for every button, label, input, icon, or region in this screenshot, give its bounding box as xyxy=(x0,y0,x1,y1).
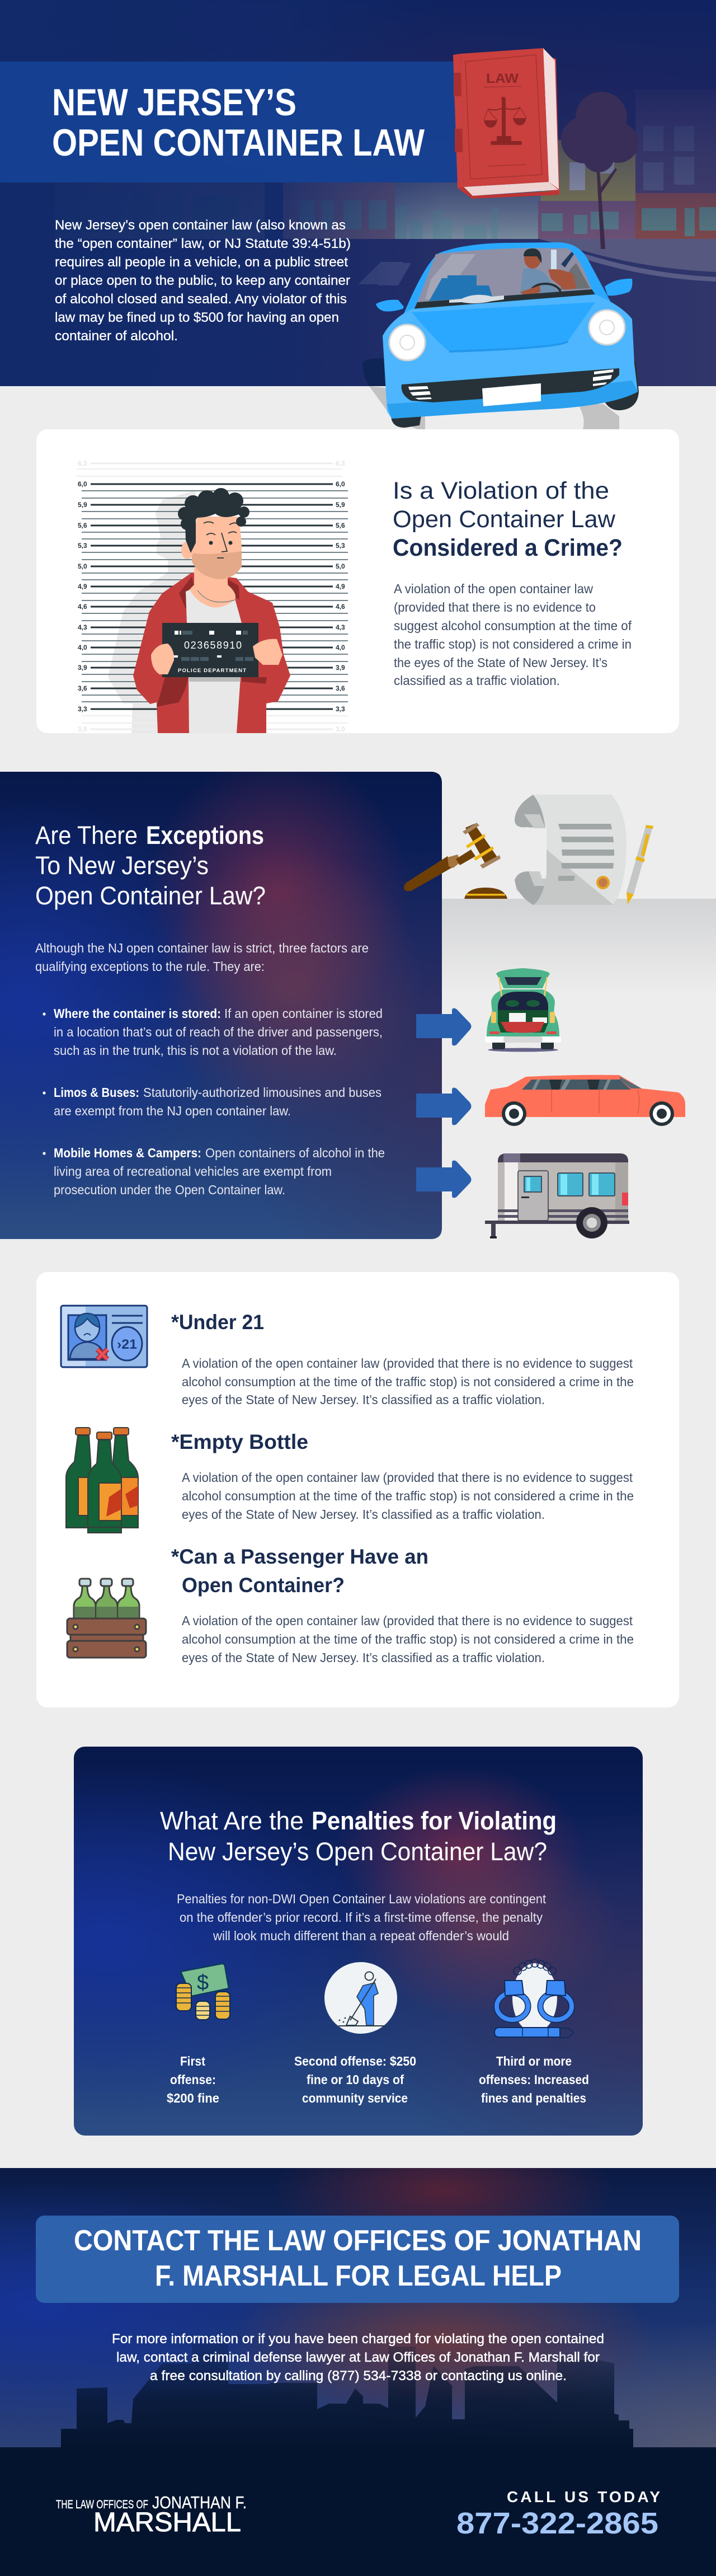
heading band: CONTACT THE LAW OFFICES OF JONATHAN xyxy=(74,2225,642,2257)
text block: (provided that there is no evidence to xyxy=(394,600,596,614)
height chart: 4,0 xyxy=(78,644,87,651)
height chart: 4,6 xyxy=(78,603,87,611)
label: second offense: Second offense: $250 xyxy=(294,2054,416,2068)
driver xyxy=(429,248,590,303)
bullet: where the container is stored: Where the container is stored: xyxy=(54,1006,221,1021)
height chart: 4,9 xyxy=(336,583,345,590)
label: third offense: Third or more xyxy=(496,2054,572,2068)
number plate xyxy=(482,383,541,406)
height chart: 3,9 xyxy=(336,664,345,672)
placard xyxy=(162,623,258,677)
icon: community service sweeper xyxy=(324,1962,397,2034)
person shadow xyxy=(108,491,196,733)
grille xyxy=(402,368,619,402)
text block: passenger xyxy=(182,1613,634,1665)
height chart: 5,3 xyxy=(336,542,345,550)
text block: under 21: eyes of the State of New Jersey. It’s classified as a traffic violation. xyxy=(182,1392,545,1407)
bullet: mobile homes and campers: living area of recreational vehicles are exempt from xyxy=(54,1164,332,1179)
text block: intro paragraph: requires all people in a vehicle, on a public street xyxy=(55,255,348,270)
heading: under 21: *Under 21 xyxy=(171,1311,264,1334)
icon: underage id card: ›21 xyxy=(117,1337,137,1352)
desk surface xyxy=(442,899,716,994)
logo xyxy=(56,2493,247,2537)
height chart: 6,3 xyxy=(336,459,345,467)
height chart: 5,6 xyxy=(78,522,87,529)
icon: handcuffs and baton xyxy=(494,1959,574,2038)
height chart: 4,9 xyxy=(78,583,87,590)
height chart: 6,0 xyxy=(78,480,87,488)
heading: Penalties for Violating xyxy=(312,1807,557,1835)
text block: contact info xyxy=(112,2331,604,2383)
icon: pen xyxy=(626,825,653,904)
height chart: 5,0 xyxy=(78,562,87,570)
bullet: mobile homes and campers xyxy=(43,1146,385,1197)
heading: passenger: Open Container? xyxy=(182,1574,345,1597)
text block: intro paragraph: the “open container” law, or NJ Statute 39:4-51b) xyxy=(55,236,351,251)
text block: classified as a traffic violation. xyxy=(394,673,560,688)
panel: hero xyxy=(0,0,716,386)
height chart: 4,6 xyxy=(336,603,345,611)
label: first offense xyxy=(167,2054,219,2105)
bullet: mobile homes and campers: Open containers of alcohol in the xyxy=(205,1146,385,1160)
title: NEW JERSEY’S xyxy=(52,81,296,124)
logo: THE LAW OFFICES OF xyxy=(56,2498,148,2511)
heading: Considered a Crime? xyxy=(393,534,623,561)
intro text xyxy=(177,1892,547,1943)
heading: passenger: *Can a Passenger Have an xyxy=(171,1545,428,1568)
call to action: CALL US TODAY xyxy=(507,2488,660,2505)
heading: Are There xyxy=(35,821,138,850)
arrow to camper xyxy=(416,1161,471,1198)
placard: POLICE DEPARTMENT xyxy=(178,668,246,674)
text block: the eyes of the State of New Jersey. It’s xyxy=(394,655,607,670)
height chart: 4,3 xyxy=(336,623,345,631)
heading: passenger xyxy=(171,1545,428,1597)
height chart: 3,3 xyxy=(336,705,345,713)
skyline silhouette xyxy=(61,2343,633,2448)
illustration: blue car with drinking driver xyxy=(362,242,639,429)
bullet: limos and buses: Statutorily-authorized limousines and buses xyxy=(143,1085,381,1100)
heading: To New Jersey’s xyxy=(35,851,209,880)
label: third offense: fines and penalties xyxy=(481,2091,586,2105)
label: second offense: fine or 10 days of xyxy=(307,2072,404,2087)
heading: New Jersey’s Open Container Law? xyxy=(168,1837,547,1866)
height chart: 3,0 xyxy=(336,725,345,733)
text block: empty bottle: alcohol consumption at the time of the traffic stop) is not considered a crime in the xyxy=(182,1489,634,1503)
text block: intro paragraph xyxy=(55,218,351,344)
hero background street scene xyxy=(0,0,716,386)
height chart: 3,9 xyxy=(78,664,87,672)
logo: JONATHAN F. xyxy=(152,2493,247,2512)
panel: exceptions xyxy=(0,772,442,1239)
panel: under 21, empty bottle, passenger xyxy=(36,1272,679,1707)
icon: crate of bottles xyxy=(67,1579,146,1658)
height chart: 6,3 xyxy=(78,459,87,467)
panel: contact xyxy=(0,2168,716,2576)
text block: A violation of the open container law xyxy=(394,581,593,596)
text block: passenger: eyes of the State of New Jersey. It’s classified as a traffic violation. xyxy=(182,1650,545,1665)
height chart: 5,9 xyxy=(78,501,87,509)
text block: passenger: alcohol consumption at the time of the traffic stop) is not considered a crime in the xyxy=(182,1632,634,1646)
bullet: limos and buses: are exempt from the NJ open container law. xyxy=(54,1104,291,1118)
logo: MARSHALL xyxy=(93,2508,241,2537)
height chart: 6,0 xyxy=(336,480,345,488)
bullet: mobile homes and campers: prosecution under the Open Container law. xyxy=(54,1183,285,1197)
text block xyxy=(394,581,632,688)
heading band xyxy=(36,2216,679,2303)
label: second offense: community service xyxy=(302,2091,408,2105)
text block: intro paragraph: New Jersey’s open container law (also known as xyxy=(55,218,346,233)
bullet: limos and buses xyxy=(43,1085,381,1118)
icon: money and coins xyxy=(176,1964,230,2020)
icon: legal scroll xyxy=(515,795,626,905)
footer base xyxy=(0,2447,716,2576)
height chart: 3,6 xyxy=(336,684,345,692)
label: first offense: $200 fine xyxy=(167,2091,219,2105)
text block: under 21: alcohol consumption at the time of the traffic stop) is not considered a crime in the xyxy=(182,1374,634,1389)
text block: passenger: A violation of the open container law (provided that there is no evidence to suggest xyxy=(182,1613,633,1628)
text block: the traffic stop) is not considered a crime in xyxy=(394,637,632,651)
icon: red law book xyxy=(453,48,559,199)
text block: empty bottle xyxy=(182,1470,634,1522)
heading band: F. MARSHALL FOR LEGAL HELP xyxy=(155,2260,562,2292)
intro text: Penalties for non-DWI Open Container Law violations are contingent xyxy=(177,1892,547,1906)
icon: car with open trunk xyxy=(485,968,561,1052)
bullet: mobile homes and campers: Mobile Homes & Campers: xyxy=(54,1146,201,1160)
title: OPEN CONTAINER LAW xyxy=(52,121,425,164)
heading: Open Container Law xyxy=(393,506,616,533)
height chart: 3,6 xyxy=(78,684,87,692)
icon: money and coins: $ xyxy=(197,1971,209,1995)
height chart: 4,3 xyxy=(78,623,87,631)
text block: under 21: A violation of the open container law (provided that there is no evidence to suggest xyxy=(182,1356,633,1371)
intro text: will look much different than a repeat offender’s would xyxy=(213,1929,509,1943)
text block: suggest alcohol consumption at the time of xyxy=(394,618,632,633)
intro text: on the offender’s prior record. If it’s a first-time offense, the penalty xyxy=(180,1910,543,1925)
bullet: where the container is stored: If an open container is stored xyxy=(224,1006,383,1021)
text block: contact info: law, contact a criminal defense lawyer at Law Offices of Jonathan F. Marshall for xyxy=(116,2350,600,2365)
text block: empty bottle: eyes of the State of New Jersey. It’s classified as a traffic violation. xyxy=(182,1507,545,1522)
panel: is a violation a crime xyxy=(36,429,679,733)
title band xyxy=(0,62,464,182)
bullet: where the container is stored: such as in the trunk, this is not a violation of the law. xyxy=(54,1043,337,1058)
height chart: 5,9 xyxy=(336,501,345,509)
headlights xyxy=(389,310,625,360)
icon: gavel xyxy=(404,823,507,899)
heading: Exceptions xyxy=(146,821,264,850)
height chart: 3,3 xyxy=(78,705,87,713)
label: third offense xyxy=(479,2054,589,2105)
icon: limousine xyxy=(485,1075,685,1126)
text block: contact info: For more information or if you have been charged for violating the open contained xyxy=(112,2331,604,2347)
heading: What Are the xyxy=(160,1807,304,1835)
label: first offense: offense: xyxy=(170,2072,216,2087)
arrow to hatchback xyxy=(416,1008,471,1045)
hands xyxy=(151,639,282,674)
text block: under 21 xyxy=(182,1356,634,1407)
bullet: where the container is stored xyxy=(43,1006,383,1058)
text block: intro paragraph: or place open to the public, to keep any container xyxy=(55,273,350,288)
placard: 023658910 xyxy=(184,640,242,651)
intro text: qualifying exceptions to the rule. They are: xyxy=(35,959,265,974)
height chart: 5,3 xyxy=(78,542,87,550)
icon: underage id card xyxy=(61,1306,147,1367)
bullet: limos and buses: Limos & Buses: xyxy=(54,1085,139,1100)
label: third offense: offenses: Increased xyxy=(479,2072,589,2087)
heading: empty bottle: *Empty Bottle xyxy=(171,1430,308,1453)
height chart: 5,0 xyxy=(336,562,345,570)
heading: Open Container Law? xyxy=(35,881,266,910)
icon: camper trailer xyxy=(485,1153,629,1238)
text block: intro paragraph: container of alcohol. xyxy=(55,329,178,344)
label: second offense xyxy=(294,2054,416,2105)
title xyxy=(52,81,425,164)
label: first offense: First xyxy=(180,2054,205,2068)
heading: Is a Violation of the xyxy=(393,477,609,504)
bullet: where the container is stored: in a location that’s out of reach of the driver and passengers, xyxy=(54,1025,383,1039)
mugshot person xyxy=(133,488,290,733)
icon: three beer bottles xyxy=(66,1428,138,1533)
text block: empty bottle: A violation of the open container law (provided that there is no evidence to suggest xyxy=(182,1470,633,1485)
text block: intro paragraph: law may be fined up to $500 for having an open xyxy=(55,310,339,325)
panel: penalties xyxy=(74,1747,643,2136)
intro text: Although the NJ open container law is strict, three factors are xyxy=(35,941,369,955)
height chart: 3,0 xyxy=(78,725,87,733)
height chart: 4,0 xyxy=(336,644,345,651)
heading xyxy=(393,477,623,561)
text block: intro paragraph: of alcohol closed and sealed. Any violator of this xyxy=(55,292,347,307)
heading xyxy=(160,1807,557,1866)
height chart: 5,6 xyxy=(336,522,345,529)
text block: contact info: a free consultation by calling (877) 534-7338 or contacting us online. xyxy=(150,2368,567,2383)
icon: red law book: LAW xyxy=(486,71,519,86)
call to action xyxy=(456,2488,660,2540)
arrow to limousine xyxy=(416,1088,471,1125)
street tree xyxy=(561,92,638,249)
call to action: 877-322-2865 xyxy=(456,2507,658,2540)
intro text xyxy=(35,941,369,974)
heading xyxy=(35,821,266,910)
height chart xyxy=(77,459,348,733)
icon: scales xyxy=(484,97,526,145)
